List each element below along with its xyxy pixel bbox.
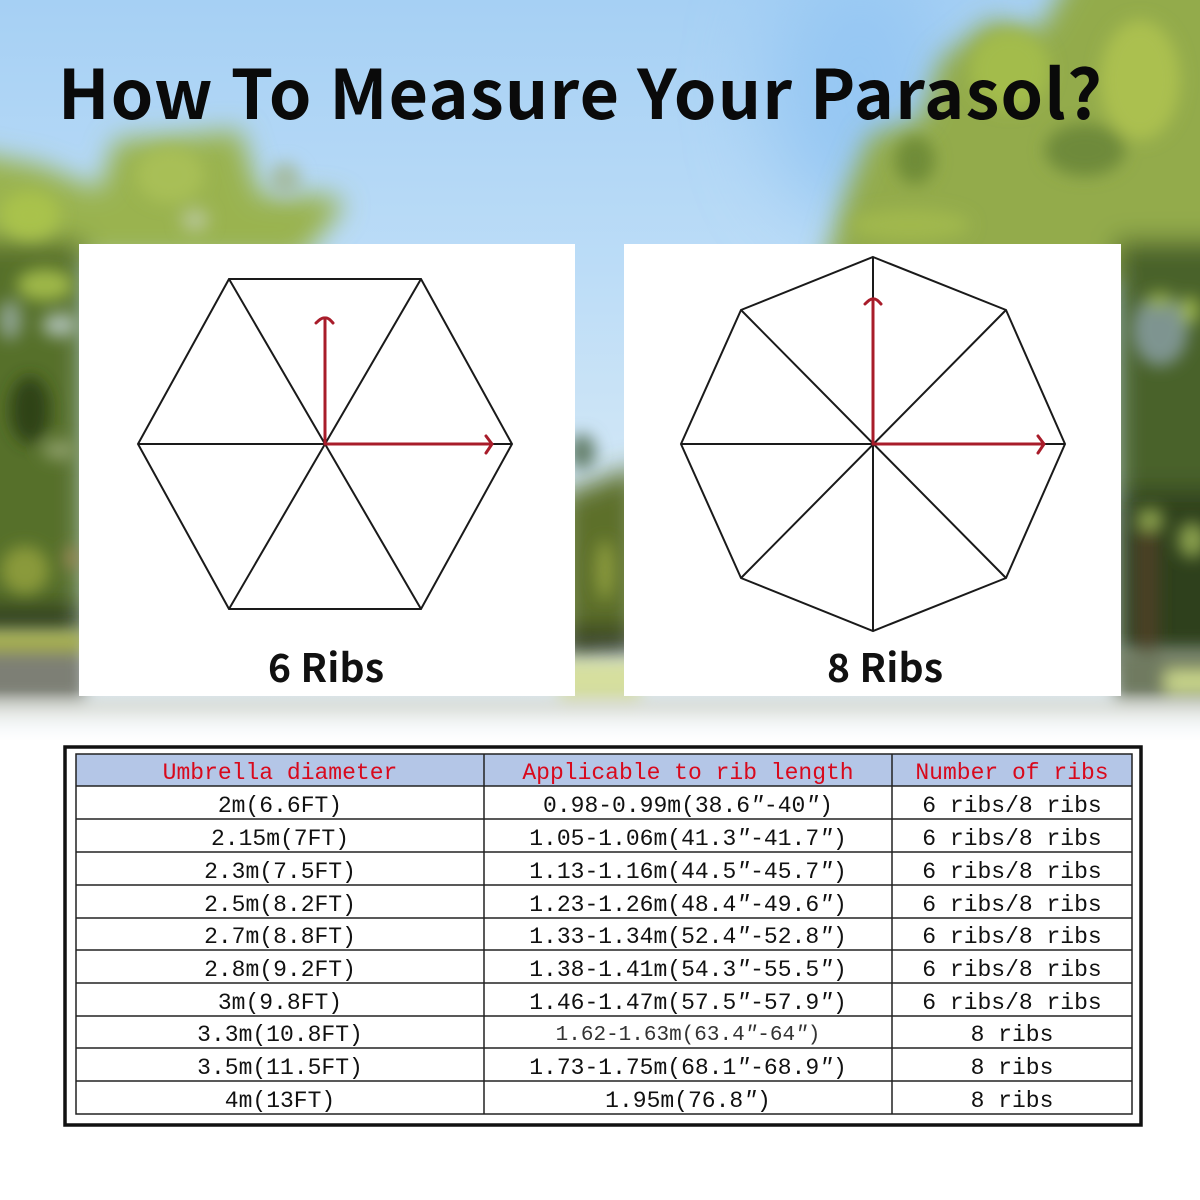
table body rows: 6 ribs/8 ribs [922,793,1102,819]
label: 8 Ribs: 8 Ribs [827,638,943,694]
panel: 8 ribs [624,244,1121,696]
label: 6 Ribs: 6 Ribs [268,638,384,694]
table body rows: 6 ribs/8 ribs [922,826,1102,852]
table body rows: 2.15m(7FT) [211,826,349,852]
left tree [0,130,345,260]
table body rows: 6 ribs/8 ribs [922,990,1102,1016]
table body rows: 1.95m(76.8″) [605,1088,771,1114]
table body rows: 2m(6.6FT) [218,793,342,819]
background: blurred park scene [0,0,1200,750]
table body rows: 3m(9.8FT) [218,990,342,1016]
table body rows: 1.73-1.75m(68.1″-68.9″) [529,1055,847,1081]
table body rows: 8 ribs [971,1022,1053,1048]
table outer frame [65,747,1141,1125]
red arrows: rib length [865,299,1044,453]
grass and path [0,632,85,654]
table body rows: 8 ribs [971,1088,1053,1114]
hexagon diagram [138,279,512,609]
table body rows: 1.05-1.06m(41.3″-41.7″) [529,826,847,852]
table header row: Number of ribs [915,760,1109,786]
table header row: Applicable to rib length [522,760,854,786]
table body rows: 1.13-1.16m(44.5″-45.7″) [529,859,847,885]
table body rows: 2.3m(7.5FT) [204,859,356,885]
table body rows: 3.3m(10.8FT) [197,1022,363,1048]
right tree [820,0,1200,280]
table body rows: 1.62-1.63m(63.4″-64″) [556,1024,820,1047]
table body rows: 6 ribs/8 ribs [922,957,1102,983]
table body rows: 6 ribs/8 ribs [922,859,1102,885]
table body rows: 6 ribs/8 ribs [922,892,1102,918]
table body rows [197,793,1102,1114]
table body rows: 0.98-0.99m(38.6″-40″) [543,793,833,819]
table body rows: 2.5m(8.2FT) [204,892,356,918]
table body rows: 2.8m(9.2FT) [204,957,356,983]
title: How To Measure Your Parasol? [58,40,1102,139]
table body rows: 2.7m(8.8FT) [204,924,356,950]
table header row: Umbrella diameter [163,760,397,786]
table body rows: 6 ribs/8 ribs [922,924,1102,950]
table body rows: 1.33-1.34m(52.4″-52.8″) [529,924,847,950]
table body rows: 4m(13FT) [225,1088,335,1114]
size table [65,747,1141,1125]
panel: 6 ribs [79,244,575,696]
table grid lines [76,754,1132,1114]
table header row [76,754,1132,786]
centre background tree [560,465,640,660]
table body rows: 1.46-1.47m(57.5″-57.9″) [529,990,847,1016]
tree highlights [0,191,60,239]
table body rows: 8 ribs [971,1055,1053,1081]
table body rows: 1.38-1.41m(54.3″-55.5″) [529,957,847,983]
octagon diagram [681,257,1065,631]
table body rows: 3.5m(11.5FT) [197,1055,363,1081]
table body rows: 1.23-1.26m(48.4″-49.6″) [529,892,847,918]
red arrows: rib length [316,318,492,453]
